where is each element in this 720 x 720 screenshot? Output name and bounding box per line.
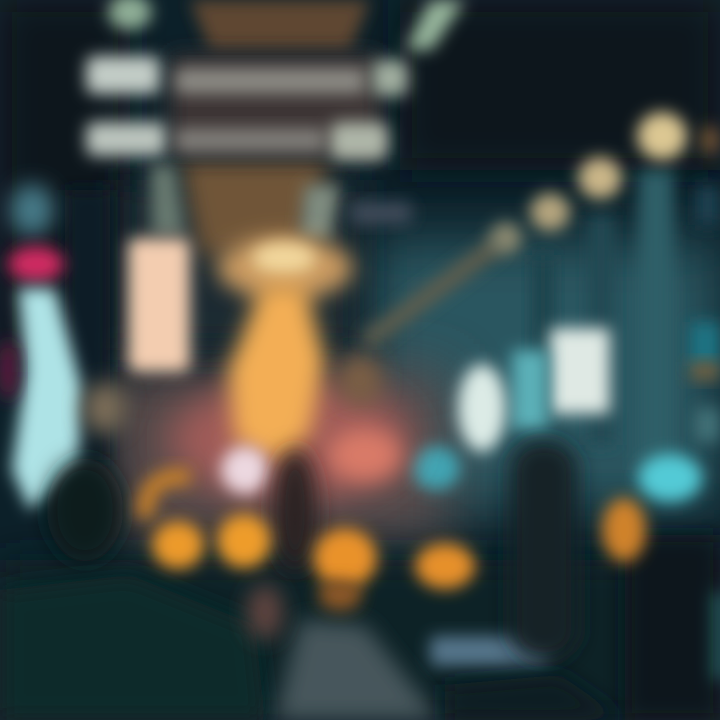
ceiling	[108, 0, 465, 255]
right pillars	[532, 170, 720, 470]
foreground silhouettes	[0, 440, 720, 720]
headline blur	[86, 56, 412, 224]
left banners	[0, 184, 190, 510]
right signs	[412, 328, 720, 680]
orange lights	[145, 477, 646, 640]
central glowing figure	[170, 236, 410, 500]
lamps and beam	[360, 112, 720, 348]
